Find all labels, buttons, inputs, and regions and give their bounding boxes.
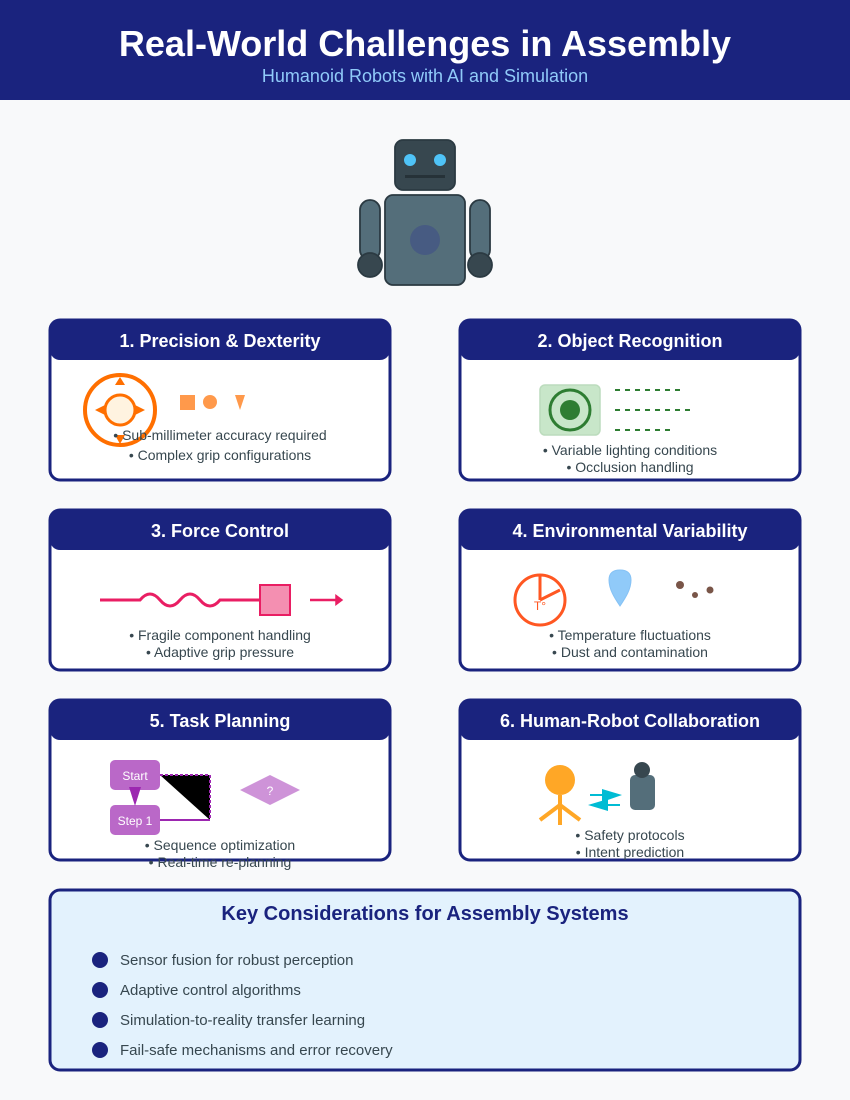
heading: card 5: 5. Task Planning (150, 711, 290, 731)
text: card 1 bullets (113, 427, 327, 463)
list item: sim-to-real: Simulation-to-reality transfer learning (120, 1012, 365, 1029)
panel: force control (50, 510, 390, 670)
icon: gripper target (85, 375, 155, 445)
text: card 4 bullets (549, 627, 711, 660)
icon: camera lens (540, 385, 600, 435)
icon: spring and mass (100, 585, 290, 615)
panel: task planning (50, 700, 390, 870)
arrow: two-way exchange (588, 789, 622, 811)
panel: key considerations (50, 890, 800, 1070)
icon: small parts (180, 395, 245, 410)
text: card 5 bullets (145, 837, 295, 870)
panel: precision and dexterity (50, 320, 390, 480)
list item: fail-safe: Fail-safe mechanisms and error recovery (120, 1042, 393, 1059)
text: card 2 bullets: • Occlusion handling (566, 459, 694, 475)
icon: flowchart: ? (267, 784, 274, 798)
icon: humanoid robot (358, 140, 492, 285)
header banner (0, 0, 850, 100)
panel: object recognition (460, 320, 800, 480)
heading: card 2: 2. Object Recognition (537, 331, 723, 351)
icon: flowchart: Step 1 (118, 814, 153, 828)
icon: flowchart: Start (122, 769, 148, 783)
title: Real-World Challenges in Assembly (119, 23, 731, 64)
icon: dust particles (676, 581, 714, 598)
panel: human-robot collaboration (460, 700, 800, 860)
icon: temperature dial: T° (534, 599, 546, 613)
text: card 3 bullets: • Adaptive grip pressure (146, 644, 294, 660)
text: card 4 bullets: • Temperature fluctuations (549, 627, 711, 643)
text: card 2 bullets: • Variable lighting conditions (543, 442, 717, 458)
text: card 6 bullets: • Safety protocols (575, 827, 685, 843)
text: card 5 bullets: • Sequence optimization (145, 837, 295, 853)
icon: water drop (609, 570, 631, 606)
icon: temperature dial (515, 575, 565, 625)
heading: key considerations: Key Considerations for Assembly Systems (221, 903, 629, 925)
panel: environmental variability (460, 510, 800, 670)
heading: card 3: 3. Force Control (151, 521, 289, 541)
text: card 4 bullets: • Dust and contamination (552, 644, 708, 660)
text: card 1 bullets: • Complex grip configurations (129, 447, 311, 463)
heading: card 1: 1. Precision & Dexterity (119, 331, 321, 351)
heading: card 6: 6. Human-Robot Collaboration (500, 711, 760, 731)
arrow: force direction (310, 596, 342, 604)
text: card 1 bullets: • Sub-millimeter accuracy required (113, 427, 327, 443)
icon: flowchart (110, 760, 300, 835)
text: card 5 bullets: • Real-time re-planning (149, 854, 291, 870)
icon: human figure (540, 765, 580, 825)
heading: card 4: 4. Environmental Variability (512, 521, 748, 541)
subtitle: Humanoid Robots with AI and Simulation (262, 66, 588, 86)
list item: sensor fusion: Sensor fusion for robust perception (120, 952, 353, 969)
text: card 6 bullets (575, 827, 685, 860)
icon: robot figure (630, 762, 655, 810)
text: card 2 bullets (543, 442, 717, 475)
list item: adaptive control: Adaptive control algorithms (120, 982, 301, 999)
text: card 3 bullets (129, 627, 311, 660)
text: card 6 bullets: • Intent prediction (576, 844, 684, 860)
text: card 3 bullets: • Fragile component handling (129, 627, 311, 643)
icon: scan lines (615, 390, 690, 430)
